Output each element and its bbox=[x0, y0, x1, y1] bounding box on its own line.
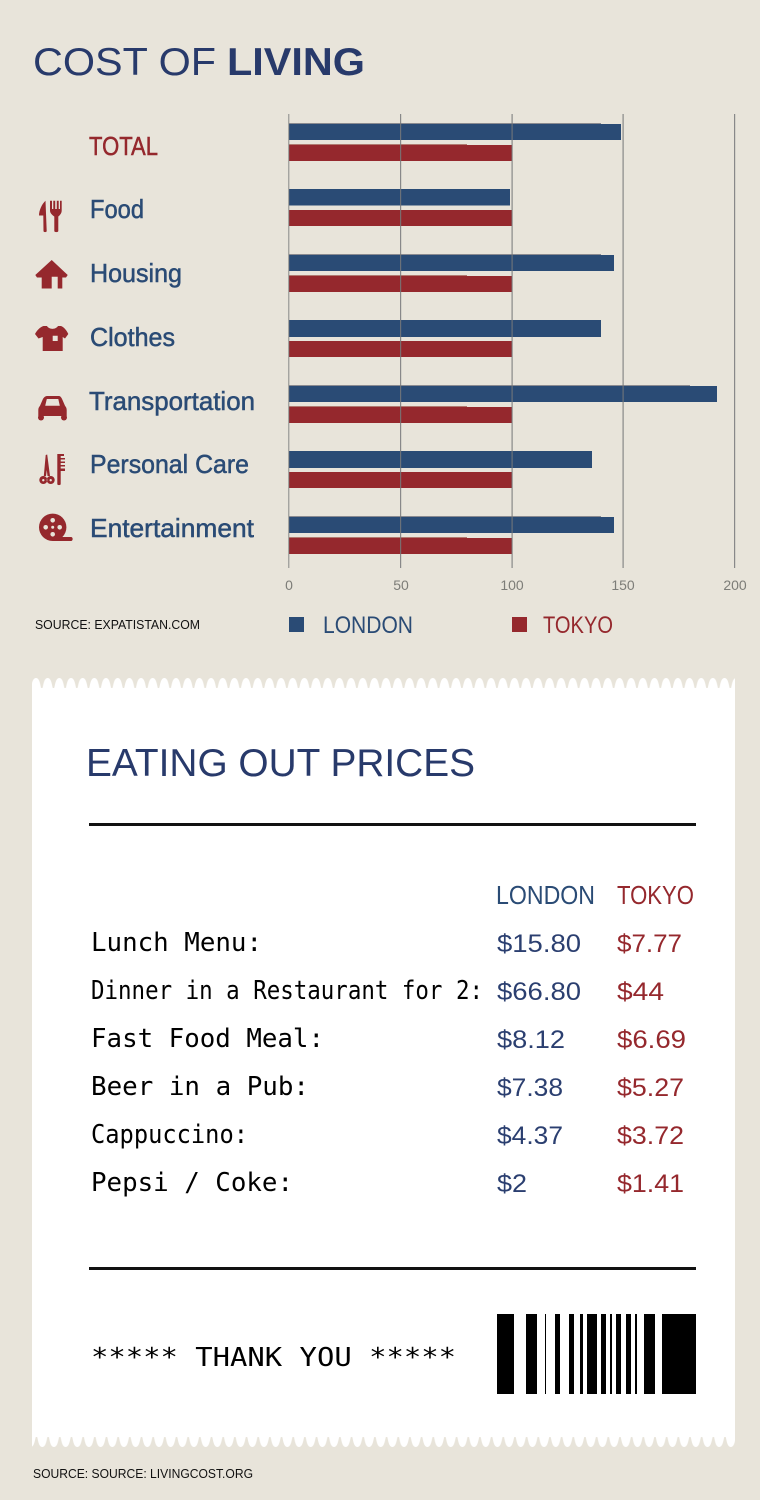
icon: car bbox=[38, 396, 67, 420]
tokyo prices bbox=[617, 930, 686, 1198]
london prices: $7.38 bbox=[497, 1074, 563, 1102]
category labels bbox=[89, 131, 255, 543]
price rows labels bbox=[91, 928, 483, 1198]
axis labels: 50 bbox=[393, 577, 409, 593]
axis labels: 200 bbox=[723, 577, 747, 593]
tokyo prices: $5.27 bbox=[617, 1074, 684, 1102]
icon: fork and knife bbox=[39, 201, 62, 232]
category labels: Housing bbox=[90, 258, 182, 288]
title: COST OF bbox=[33, 41, 216, 84]
london prices: $2 bbox=[497, 1170, 527, 1198]
icon: film reel bbox=[39, 514, 73, 541]
receipt paper bbox=[32, 678, 735, 1447]
legend: TOKYO bbox=[543, 612, 613, 639]
category labels: Entertainment bbox=[90, 513, 255, 543]
bars: clothes bbox=[289, 320, 601, 357]
bars: personal care bbox=[289, 451, 592, 488]
grid lines bbox=[288, 114, 735, 568]
axis labels: 150 bbox=[611, 577, 635, 593]
source: expatistan: SOURCE: EXPATISTAN.COM bbox=[35, 617, 200, 632]
tokyo prices: $7.77 bbox=[617, 930, 682, 958]
thank you: ***** THANK YOU ***** bbox=[91, 1343, 456, 1373]
axis labels bbox=[285, 577, 747, 593]
tokyo prices: $44 bbox=[617, 978, 664, 1006]
category labels: TOTAL bbox=[89, 131, 158, 161]
price rows labels: Cappuccino: bbox=[91, 1120, 248, 1150]
category labels: Clothes bbox=[90, 322, 175, 352]
london prices: $4.37 bbox=[497, 1122, 563, 1150]
icon: scissors and comb bbox=[39, 454, 65, 485]
london prices: $8.12 bbox=[497, 1026, 565, 1054]
tokyo prices: $1.41 bbox=[617, 1170, 684, 1198]
icon: t-shirt bbox=[35, 326, 68, 351]
barcode bbox=[497, 1314, 696, 1394]
london prices: $15.80 bbox=[497, 930, 581, 958]
legend bbox=[289, 612, 613, 639]
tokyo prices: $6.69 bbox=[617, 1026, 686, 1054]
price rows labels: Pepsi / Coke: bbox=[91, 1168, 293, 1198]
panel: receipt bbox=[32, 678, 735, 1447]
title: LIVING bbox=[227, 41, 365, 84]
bar chart bbox=[285, 114, 747, 593]
column headings: TOKYO bbox=[617, 880, 694, 910]
category labels: Transportation bbox=[89, 386, 255, 416]
price rows labels: Lunch Menu: bbox=[91, 928, 262, 958]
icon: house bbox=[35, 260, 68, 288]
london prices: $66.80 bbox=[497, 978, 581, 1006]
price rows labels: Beer in a Pub: bbox=[91, 1072, 309, 1102]
axis labels: 100 bbox=[500, 577, 524, 593]
price rows labels: Dinner in a Restaurant for 2: bbox=[91, 976, 483, 1006]
heading: EATING OUT PRICES bbox=[86, 742, 475, 785]
axis labels: 0 bbox=[285, 577, 293, 593]
bars: total bbox=[289, 123, 621, 161]
bars: housing bbox=[289, 254, 614, 292]
column headings: LONDON bbox=[496, 880, 595, 910]
price rows labels: Fast Food Meal: bbox=[91, 1024, 324, 1054]
legend: LONDON bbox=[323, 612, 413, 639]
tokyo prices: $3.72 bbox=[617, 1122, 684, 1150]
bars: transportation bbox=[289, 385, 717, 423]
bars: entertainment bbox=[289, 516, 614, 554]
category labels: Personal Care bbox=[90, 449, 249, 479]
column headings bbox=[496, 880, 694, 910]
bars: food bbox=[289, 189, 512, 226]
source: livingcost: SOURCE: SOURCE: LIVINGCOST.ORG bbox=[33, 1466, 253, 1481]
category labels: Food bbox=[90, 194, 144, 224]
london prices bbox=[497, 930, 581, 1198]
